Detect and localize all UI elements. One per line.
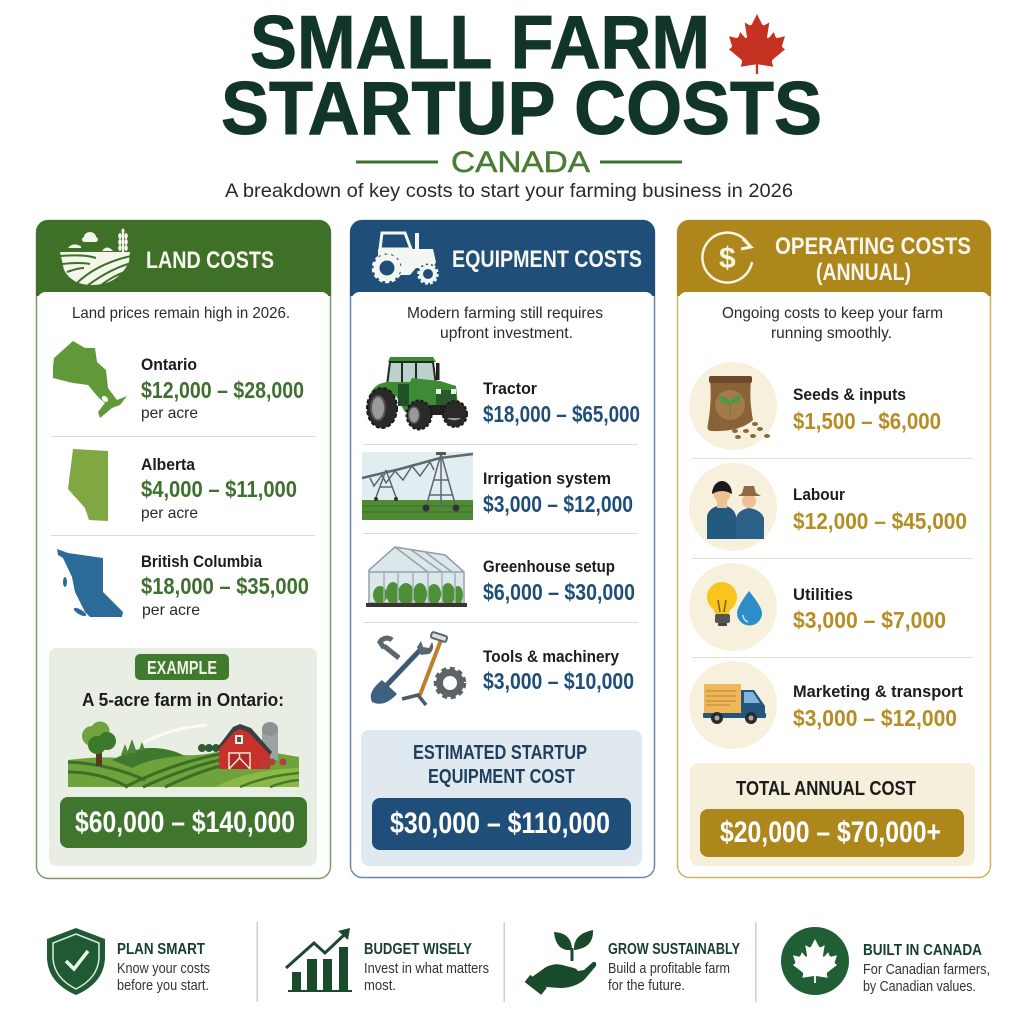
summary box [690,763,975,866]
intro text: Ongoing costs to keep your farm [722,305,943,322]
row: British Columbia: British Columbia [141,552,262,571]
example box [49,648,317,866]
heading: operating costs [775,233,971,286]
heading: operating costs: OPERATING COSTS [775,233,971,260]
row: labour: $12,000 – $45,000 [793,508,967,534]
footer item: plan smart: PLAN SMART [117,941,205,958]
intro text: Modern farming still requires [407,305,603,322]
total price pill: $30,000 – $110,000 [390,807,610,840]
heading: operating costs: (ANNUAL) [816,259,911,286]
row: tractor: $18,000 – $65,000 [483,401,640,427]
icon: seed bag [689,362,777,450]
row: Alberta [68,449,297,522]
icon: red maple leaf [729,14,785,74]
total price pill: $60,000 – $140,000 [75,806,295,839]
heading: land costs: LAND COSTS [146,247,274,274]
row: marketing and transport: Marketing & transport [793,682,963,701]
row: utilities: Utilities [793,585,853,604]
tagline: A breakdown of key costs to start your farming business in 2026 [225,180,793,202]
icon: British Columbia map [57,549,123,618]
intro text: upfront investment. [440,325,573,342]
total price pill [60,797,307,848]
footer item: grow sustainably: for the future. [608,978,685,994]
title line 1: SMALL FARM [250,0,710,84]
summary heading: EQUIPMENT COST [428,766,575,788]
footer item: plan smart [47,928,210,995]
illustration: tools [371,632,464,705]
footer item: budget wisely: most. [364,978,396,994]
subtitle: Canada [356,146,682,179]
row: Ontario: Ontario [141,355,197,374]
example heading: A 5-acre farm in Ontario: [82,690,284,710]
row: greenhouse [366,547,635,607]
icon: Alberta map [68,449,108,521]
icon: delivery truck [689,661,777,749]
row: Ontario [53,341,304,422]
total price pill [372,798,631,850]
row: Alberta: per acre [141,505,198,522]
illustration: green tractor [367,357,467,430]
row: Alberta: $4,000 – $11,000 [141,476,297,502]
row: British Columbia: $18,000 – $35,000 [141,573,309,599]
row: greenhouse: $6,000 – $30,000 [483,579,635,605]
row: British Columbia [57,549,309,619]
row: seeds: $1,500 – $6,000 [793,408,941,434]
icon: bulb and water drop [689,563,777,651]
icon: hand with sprout [525,930,596,995]
total price pill: $20,000 – $70,000+ [720,816,941,849]
summary heading [413,742,587,788]
illustration: greenhouse [366,547,467,607]
intro text: running smoothly. [771,325,892,342]
footer item: built in canada: BUILT IN CANADA [863,942,982,959]
row: utilities: $3,000 – $7,000 [793,607,946,633]
footer strip [47,922,990,1002]
footer item: budget wisely [286,928,489,994]
footer item: grow sustainably: Build a profitable farm [608,961,730,977]
row: labour [689,463,967,551]
illustration: pivot irrigation [362,452,473,520]
heading: equipment costs: EQUIPMENT COSTS [452,246,642,273]
row: irrigation [362,452,633,520]
footer item: built in canada: by Canadian values. [863,979,976,995]
row: marketing and transport: $3,000 – $12,000 [793,705,957,731]
total price pill [700,809,964,857]
footer item: plan smart: before you start. [117,978,209,994]
title line 2: STARTUP COSTS [221,66,822,150]
panel: land costs [36,220,331,878]
icon: two workers [689,463,777,551]
footer item: grow sustainably [525,930,740,995]
title block [221,0,822,202]
example badge [135,654,229,680]
summary box [361,730,642,866]
row: marketing and transport [689,661,963,749]
row: tools: $3,000 – $10,000 [483,668,634,694]
row: utilities [689,563,946,651]
icon: Ontario map [53,341,127,418]
row: tractor: Tractor [483,379,537,398]
row: irrigation: $3,000 – $12,000 [483,491,633,517]
panel: operating costs [677,220,991,878]
row: tractor [367,357,640,430]
intro text [722,305,943,342]
row: Alberta: Alberta [141,455,195,474]
footer item: plan smart: Know your costs [117,961,210,977]
row: labour: Labour [793,485,845,504]
icon: maple leaf roundel [781,927,849,995]
illustration: farm scene with barn [68,722,299,787]
row: greenhouse: Greenhouse setup [483,557,615,576]
icon: shield with check [47,928,105,995]
example badge: EXAMPLE [147,658,217,678]
icon: farmland [60,228,131,286]
row: seeds: Seeds & inputs [793,385,906,404]
subtitle: Canada: CANADA [451,146,590,179]
panel: equipment costs [350,220,655,878]
footer item: built in canada: For Canadian farmers, [863,962,990,978]
icon: dollar cycle [702,233,752,283]
row: British Columbia: per acre [142,602,200,619]
footer item: grow sustainably: GROW SUSTAINABLY [608,941,740,958]
row: seeds [689,362,941,450]
row: irrigation: Irrigation system [483,469,611,488]
row: Ontario: per acre [141,405,198,422]
summary heading: ESTIMATED STARTUP [413,742,587,764]
row: tools: Tools & machinery [483,647,619,666]
icon: white tractor [372,233,438,284]
footer item: budget wisely: Invest in what matters [364,961,489,977]
intro text: Land prices remain high in 2026. [72,305,290,322]
icon: dollar cycle: $ [719,242,736,275]
intro text [407,305,603,342]
footer item: built in canada [781,927,990,995]
icon: growth chart [286,928,352,992]
summary heading: TOTAL ANNUAL COST [736,778,916,800]
row: Ontario: $12,000 – $28,000 [141,377,304,403]
row: tools [371,632,634,705]
footer item: budget wisely: BUDGET WISELY [364,941,472,958]
